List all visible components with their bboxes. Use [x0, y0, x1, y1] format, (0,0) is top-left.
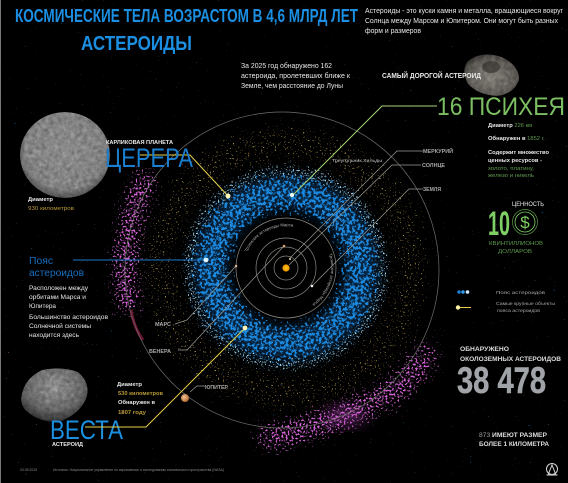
- main asteroid belt: blue ring: [189, 171, 383, 365]
- legend: belt dots: [457, 290, 469, 294]
- image: ceres: [20, 112, 110, 198]
- ceres facts: 930 километров: [28, 206, 74, 212]
- vesta marker: [243, 326, 247, 330]
- vesta facts: 530 километров: [118, 391, 163, 397]
- legend: пояса астероидов: [497, 308, 541, 313]
- ceres leader: [140, 155, 228, 196]
- legend: largest objects marker: [456, 305, 471, 310]
- stat: near earth asteroids: [457, 346, 561, 401]
- planet labels: [149, 147, 453, 391]
- vesta facts: Диаметр: [117, 382, 142, 388]
- icon: agency logo: [546, 464, 558, 475]
- vesta facts: 1807 году: [118, 410, 147, 416]
- intro text: Солнца между Марсом и Юпитером. Они могут быть разных: [365, 17, 558, 25]
- belt description: Расположен между: [29, 285, 89, 292]
- planet labels: СОЛНЦЕ: [422, 163, 446, 169]
- ceres marker: [226, 194, 230, 198]
- belt marker: [204, 258, 208, 262]
- inner black core: [234, 216, 338, 320]
- planet labels: МАРС: [155, 322, 171, 328]
- chart: solar system asteroid map: [85, 73, 479, 480]
- legend: Самые крупные объекты: [496, 301, 555, 306]
- stat: larger than one kilometre: 873 ИМЕЮТ РАЗМЕР: [479, 432, 548, 439]
- vesta kicker: АСТЕРОИД: [52, 442, 83, 448]
- intro text: форм и размеров: [365, 28, 421, 35]
- stat: larger than one kilometre: БОЛЕЕ 1 КИЛОМЕТРА: [479, 441, 549, 448]
- stat: near earth asteroids: ОБНАРУЖЕНО: [460, 346, 509, 353]
- ceres facts: [28, 197, 74, 212]
- icon: dollar coin: [512, 210, 538, 234]
- vesta leader: [85, 328, 245, 427]
- ceres kicker: КАРЛИКОВАЯ ПЛАНЕТА: [106, 140, 173, 146]
- value unit: [489, 241, 543, 255]
- belt leader: [73, 259, 205, 261]
- hilda label: Треугольник Хильды: [332, 158, 382, 163]
- mars trojan labels: Троянские астероиды Марса: [312, 253, 334, 306]
- value unit: КВИНТИЛЛИОНОВ: [489, 241, 543, 247]
- image: psyche: [464, 54, 519, 96]
- stat: near earth asteroids: ОКОЛОЗЕМНЫХ АСТЕРОИДОВ: [460, 356, 561, 363]
- pink bottom right trojan cluster: [255, 345, 432, 440]
- inner planet orbits: [236, 218, 336, 318]
- legend: [456, 290, 555, 313]
- psyche facts: [488, 123, 549, 179]
- value unit: ДОЛЛАРОВ: [498, 249, 532, 255]
- vesta name: ВЕСТА: [50, 415, 123, 445]
- psyche leader: [293, 106, 437, 195]
- big number: 38 478: [457, 360, 546, 401]
- near moon text: За 2025 год обнаружено 162: [241, 62, 332, 70]
- ceres facts: Диаметр: [28, 197, 54, 203]
- belt heading: астероидов: [29, 267, 84, 279]
- vesta facts: Обнаружен в: [118, 399, 155, 406]
- psyche marker: [290, 193, 294, 197]
- psyche facts: Обнаружен в 1852 г.: [488, 135, 545, 142]
- mars trojan labels: [244, 223, 334, 306]
- belt description: [29, 285, 109, 339]
- belt description: Юпитера: [29, 303, 56, 310]
- belt description: Большинство астероидов: [29, 314, 109, 321]
- jupiter orbit: [125, 112, 439, 428]
- psyche facts: железо и никель: [488, 173, 534, 179]
- ceres name: ЦЕРЕРА: [105, 143, 193, 173]
- near moon text: астероида, пролетевших ближе к: [241, 72, 351, 80]
- belt heading: [29, 255, 84, 279]
- near moon text: [241, 62, 351, 90]
- vesta facts: [117, 382, 163, 416]
- psyche facts: Содержит множество: [488, 150, 549, 156]
- belt description: Солнечной системы: [29, 322, 91, 330]
- psyche facts: ценных ресурсов -: [488, 158, 542, 164]
- value heading: ЦЕННОСТЬ: [512, 202, 544, 208]
- psyche facts: Диаметр 226 км: [488, 123, 532, 129]
- psyche kicker: САМЫЙ ДОРОГОЙ АСТЕРОИД: [382, 71, 482, 80]
- belt description: находится здесь: [29, 332, 80, 339]
- mars trojan labels: Троянские астероиды Марса: [244, 223, 293, 251]
- belt description: орбитами Марса и: [29, 293, 86, 301]
- intro text: [365, 8, 563, 35]
- value number: 10: [488, 205, 510, 243]
- legend: Пояс астероидов: [496, 290, 546, 295]
- dark red arc segment: [131, 310, 143, 340]
- jupiter: [181, 394, 189, 402]
- title: КОСМИЧЕСКИЕ ТЕЛА ВОЗРАСТОМ В 4,6 МЛРД ЛЕТ: [15, 6, 358, 26]
- planet labels: МЕРКУРИЙ: [423, 147, 453, 155]
- subtitle: АСТЕРОИДЫ: [81, 33, 192, 55]
- belt heading: Пояс: [29, 255, 53, 267]
- pink left trojan cluster: [125, 170, 150, 316]
- panel: psyche: [290, 54, 565, 255]
- planet labels: ЮПИТЕР: [205, 385, 229, 391]
- psyche facts: золото, платину,: [488, 166, 534, 172]
- planet dots: [235, 245, 313, 287]
- planet labels: ВЕНЕРА: [149, 349, 171, 355]
- footer: 03.05.2025: [20, 468, 37, 472]
- stat: larger than one kilometre: [479, 432, 549, 448]
- footer: Источник: Национальное управление по аэронавтике и исследованию космического пространства (NASA): [53, 468, 224, 472]
- panel: vesta: [21, 326, 247, 448]
- planet labels: ЗЕМЛЯ: [423, 187, 441, 193]
- near moon text: Земле, чем расстояние до Луны: [241, 83, 343, 90]
- sun: [282, 264, 290, 272]
- planet leader lines: [175, 151, 423, 392]
- panel: ceres: [20, 112, 230, 212]
- intro text: Астероиды - это куски камня и металла, вращающиеся вокруг: [365, 8, 563, 15]
- image: vesta: [21, 368, 88, 422]
- panel: asteroid belt: [29, 255, 208, 339]
- Hilda and outer yellow asteroids: [161, 143, 411, 393]
- icon: dollar coin: $: [520, 213, 530, 232]
